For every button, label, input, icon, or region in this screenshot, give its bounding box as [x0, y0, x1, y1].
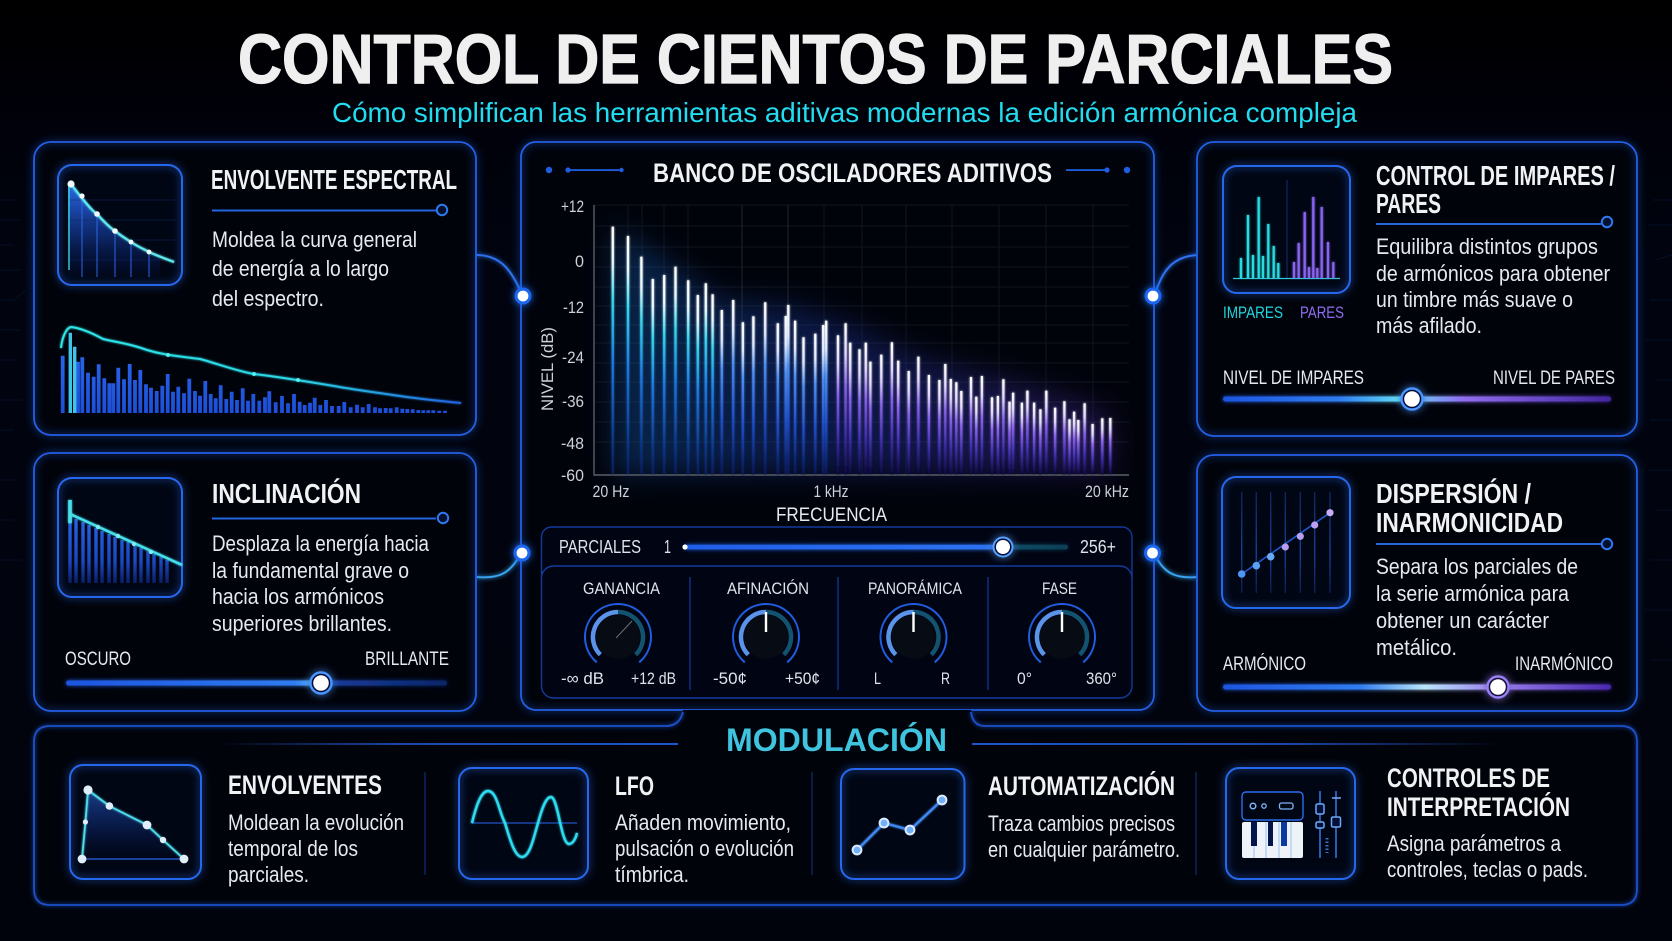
title: CONTROL DE CIENTOS DE PARCIALES — [238, 20, 1393, 98]
text: lfo description: pulsación o evolución — [615, 836, 794, 861]
slider: oscuro a brillante: BRILLANTE — [365, 649, 449, 670]
panel: modulación — [34, 710, 1637, 905]
knob: panorámica: L — [874, 669, 881, 688]
heading rules — [219, 743, 1500, 745]
x axis labels — [592, 482, 1129, 501]
item: envolventes — [70, 765, 404, 887]
slider: nivel de impares y pares: NIVEL DE PARES — [1493, 368, 1615, 389]
icon: keyboard and faders — [1226, 768, 1355, 879]
heading: modulación: MODULACIÓN — [726, 722, 947, 758]
heading: inclinación: INCLINACIÓN — [212, 478, 361, 509]
slider: parciales: PARCIALES — [559, 537, 641, 557]
slider: nivel de impares y pares: NIVEL DE IMPARES — [1223, 368, 1364, 389]
y axis labels: +12 — [561, 197, 584, 216]
text: dispersión description: la serie armónica para — [1376, 581, 1570, 606]
heading: controles de interpretación: INTERPRETACIÓN — [1387, 791, 1570, 822]
text: automatización description: Traza cambios precisos — [988, 811, 1175, 836]
knob: fase — [1017, 579, 1117, 688]
slider: armónico a inarmónico: INARMÓNICO — [1515, 653, 1613, 675]
text: dispersión description — [1376, 554, 1578, 660]
x axis labels: 1 kHz — [814, 482, 848, 501]
item: automatización — [841, 769, 1180, 879]
y axis title: NIVEL (dB) — [538, 327, 557, 411]
icon: dispersed partials — [1222, 477, 1350, 608]
icon: sine wave — [459, 768, 588, 879]
slider: oscuro a brillante: OSCURO — [65, 649, 131, 670]
knob: panorámica: PANORÁMICA — [868, 579, 963, 598]
text: lfo description: Añaden movimiento, — [615, 810, 791, 835]
legend: pares: PARES — [1300, 303, 1344, 322]
heading: automatización: AUTOMATIZACIÓN — [988, 770, 1175, 801]
knob: fase: 360° — [1086, 669, 1117, 688]
knob: afinación — [713, 579, 820, 688]
heading: envolventes: ENVOLVENTES — [228, 770, 382, 800]
text: inclinación description: hacia los armónicos — [212, 584, 384, 609]
knob: fase: 0° — [1017, 669, 1032, 688]
icon: envelope shape — [70, 765, 201, 879]
text: dispersión description: obtener un carácter — [1376, 608, 1549, 633]
heading: control de impares / pares — [1376, 160, 1615, 219]
knob: panorámica: R — [941, 669, 950, 688]
heading: control de impares / pares: PARES — [1376, 188, 1441, 219]
heading rule — [1376, 539, 1612, 549]
text: envolvente espectral description: de energía a lo largo — [212, 256, 389, 281]
slider: armónico a inarmónico — [1223, 653, 1613, 698]
text: impares pares description — [1376, 234, 1610, 338]
text: impares pares description: más afilado. — [1376, 313, 1482, 338]
knob: afinación: -50¢ — [713, 669, 747, 688]
y axis labels: 0 — [575, 252, 584, 271]
panel: envolvente espectral — [34, 142, 476, 435]
text: envolvente espectral description — [212, 227, 417, 311]
y axis labels: -48 — [561, 434, 584, 453]
text: envolventes description: parciales. — [228, 862, 309, 887]
heading ornaments — [546, 167, 1130, 173]
connector: odd even to oscillator bank — [1155, 255, 1198, 294]
connector: tilt to oscillator bank — [476, 555, 520, 577]
text: envolvente espectral description: del espectro. — [212, 286, 324, 311]
icon: spectral envelope curve — [58, 165, 182, 285]
slider: nivel de impares y pares — [1223, 368, 1615, 410]
slider: oscuro a brillante — [65, 649, 449, 694]
slider: parciales: 256+ — [1080, 537, 1116, 557]
knob: afinación: +50¢ — [785, 669, 820, 688]
x axis labels: 20 Hz — [592, 482, 630, 501]
text: controles description: Asigna parámetros a — [1387, 831, 1562, 856]
y axis labels: -60 — [561, 466, 584, 485]
legend: impares: IMPARES — [1223, 303, 1283, 322]
text: dispersión description: metálico. — [1376, 635, 1457, 660]
knob: fase: FASE — [1042, 579, 1077, 598]
slider: armónico a inarmónico: ARMÓNICO — [1223, 653, 1306, 675]
item: controles de interpretación — [1226, 763, 1588, 882]
text: controles description: controles, teclas o pads. — [1387, 857, 1588, 882]
text: impares pares description: un timbre más suave o — [1376, 287, 1573, 312]
text: envolventes description: Moldean la evolución — [228, 810, 404, 835]
text: dispersión description: Separa los parciales de — [1376, 554, 1578, 579]
heading rule — [212, 205, 447, 215]
heading: controles de interpretación — [1387, 763, 1570, 822]
slider: parciales: 1 — [664, 537, 671, 557]
panel: knobs — [542, 566, 1132, 698]
text: envolventes description: temporal de los — [228, 836, 358, 861]
icon: odd and even harmonic bars — [1223, 166, 1350, 293]
knob: ganancia — [561, 579, 676, 688]
text: envolventes description — [228, 810, 404, 887]
slider: parciales — [542, 527, 1132, 587]
icon: tilt line over bars — [58, 478, 182, 597]
panel: inclinación — [34, 453, 476, 711]
text: lfo description — [615, 810, 794, 887]
panel: control de impares / pares — [1197, 142, 1637, 436]
text: automatización description: en cualquier parámetro. — [988, 837, 1180, 862]
heading: dispersión / inarmonicidad: DISPERSIÓN / — [1376, 478, 1531, 509]
text: lfo description: tímbrica. — [615, 862, 689, 887]
text: inclinación description — [212, 531, 430, 636]
icon: automation curve — [841, 769, 964, 879]
item: lfo — [459, 768, 794, 887]
chart: harmonic spectrum with envelope — [61, 327, 461, 413]
heading rule — [212, 513, 448, 523]
text: inclinación description: Desplaza la energía hacia — [212, 531, 430, 556]
chart glow — [613, 227, 1111, 474]
text: inclinación description: superiores brillantes. — [212, 611, 392, 636]
text: automatización description — [988, 811, 1180, 862]
y axis labels: -24 — [562, 348, 584, 367]
heading: banco de osciladores: BANCO DE OSCILADORES ADITIVOS — [653, 158, 1052, 188]
knob: ganancia: GANANCIA — [583, 579, 661, 598]
chart axes — [594, 205, 1129, 475]
knob: panorámica — [868, 579, 963, 688]
connector: dispersion to oscillator bank — [1155, 555, 1198, 577]
x axis labels: 20 kHz — [1085, 482, 1129, 501]
knob: ganancia: +12 dB — [631, 669, 676, 688]
chart: additive oscillator spectrum — [538, 197, 1129, 526]
text: impares pares description: Equilibra distintos grupos — [1376, 234, 1598, 259]
knob: afinación: AFINACIÓN — [727, 579, 809, 598]
y axis labels: -36 — [562, 392, 584, 411]
y axis labels — [561, 197, 584, 485]
text: inclinación description: la fundamental grave o — [212, 558, 409, 583]
heading: envolvente espectral: ENVOLVENTE ESPECTRAL — [211, 164, 457, 195]
text: controles description — [1387, 831, 1588, 882]
y axis labels: -12 — [563, 298, 584, 317]
knob: ganancia: -∞ dB — [561, 669, 604, 688]
heading: lfo: LFO — [615, 771, 654, 801]
connector nodes — [514, 288, 1162, 562]
text: envolvente espectral description: Moldea la curva general — [212, 227, 417, 252]
x axis title: FRECUENCIA — [776, 505, 887, 526]
chart: partial bars — [612, 227, 1111, 474]
connector: spectral envelope to oscillator bank — [476, 255, 522, 294]
subtitle: Cómo simplifican las herramientas aditivas modernas la edición armónica compleja — [332, 97, 1357, 128]
heading: controles de interpretación: CONTROLES DE — [1387, 763, 1550, 793]
heading: dispersión / inarmonicidad: INARMONICIDAD — [1376, 507, 1563, 538]
panel: dispersión / inarmonicidad — [1197, 455, 1637, 711]
heading: dispersión / inarmonicidad — [1376, 478, 1563, 538]
chart grid — [594, 205, 1129, 475]
heading rule — [1376, 217, 1612, 227]
panel: banco de osciladores aditivos — [521, 142, 1154, 710]
text: impares pares description: de armónicos para obtener — [1376, 261, 1610, 286]
